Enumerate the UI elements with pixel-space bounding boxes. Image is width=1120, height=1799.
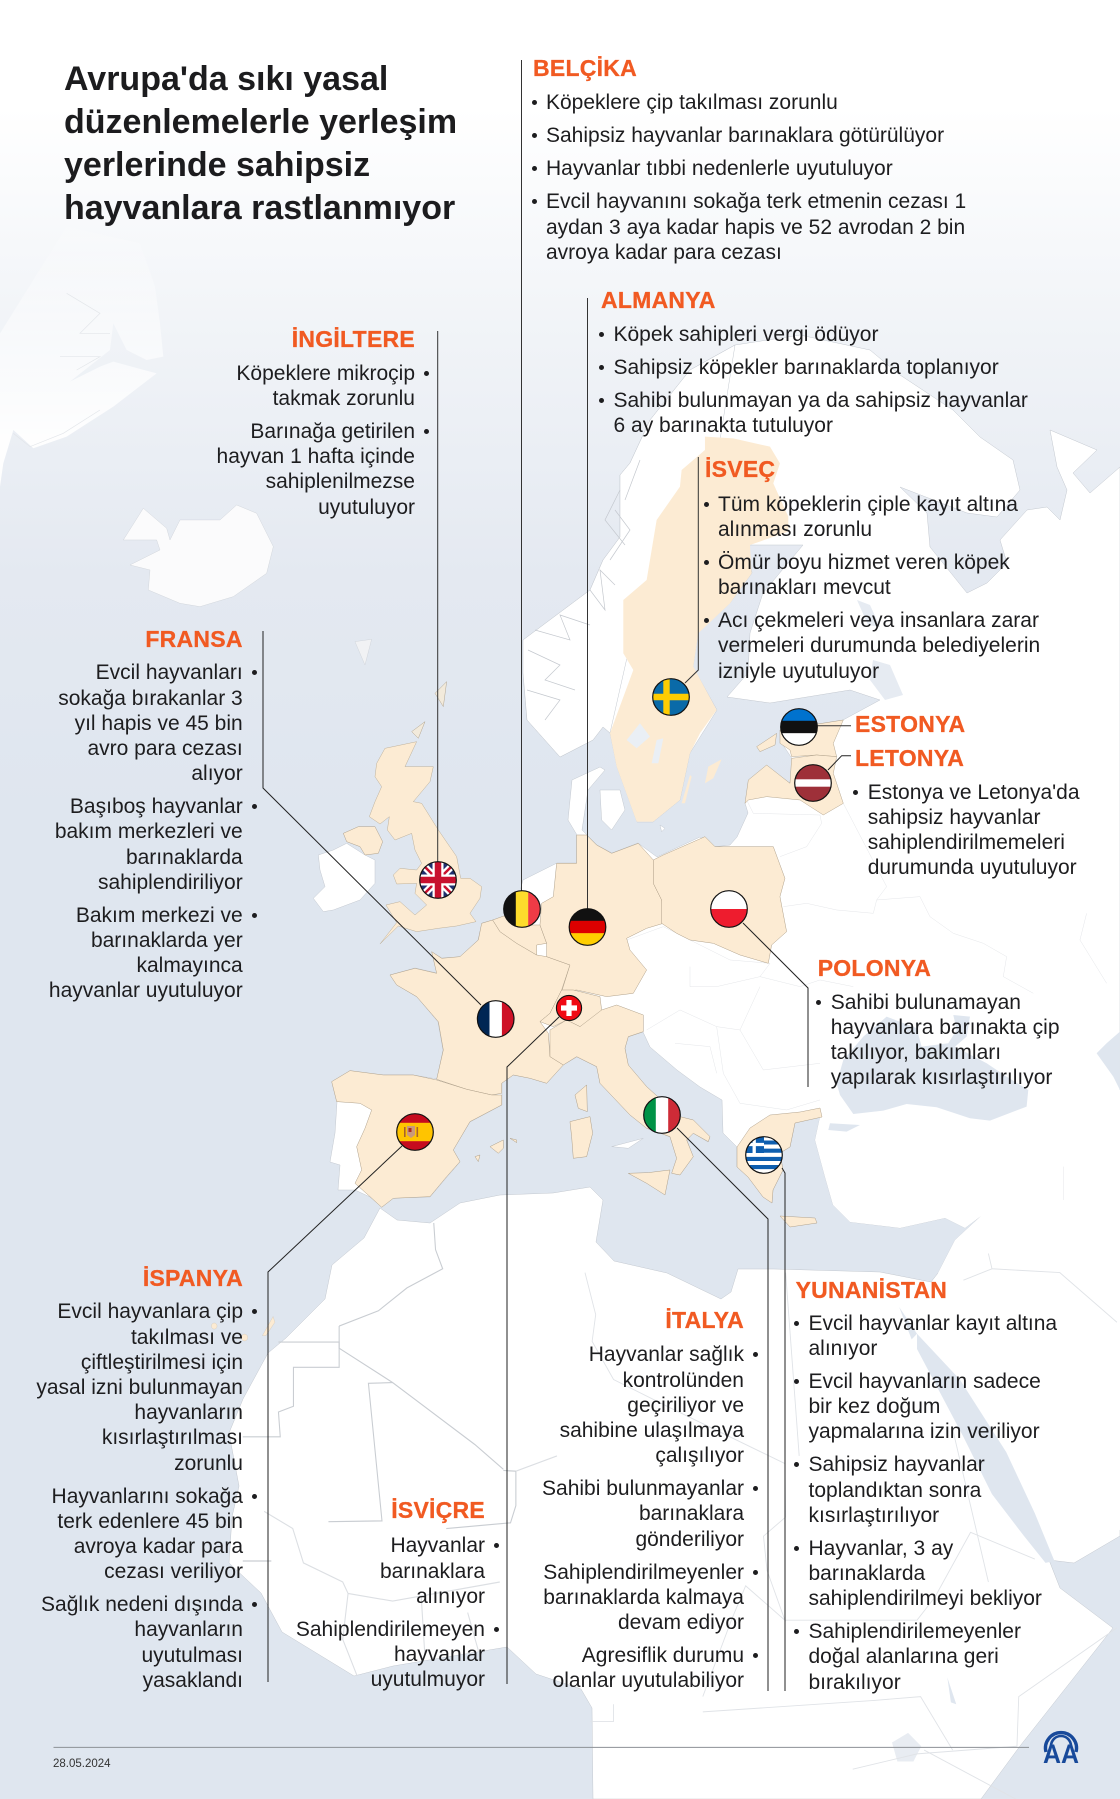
flag: Poland	[710, 890, 748, 928]
text block: İsveç: Tüm köpeklerin çiple kayıt altına	[718, 493, 1018, 516]
text block: İsviçre	[296, 1534, 499, 1691]
leader line: Sweden	[685, 457, 698, 683]
text block: İtalya: gönderiliyor	[635, 1528, 744, 1551]
text block: İsveç: izniyle uyutuluyor	[718, 660, 879, 683]
countries: Britain, France, Spain, Belgium, Germany, Switzerland, Italy, Poland	[332, 742, 787, 1207]
text block: İspanya: Sağlık nedeni dışında	[41, 1593, 243, 1616]
text block: Fransa: hayvanlar uyutuluyor	[49, 979, 243, 1002]
text block: Fransa: barınaklarda yer	[91, 929, 243, 952]
text block: Almanya: 6 ay barınakta tutuluyor	[614, 414, 833, 437]
flag: Italy	[643, 1096, 681, 1134]
text block: Belçika: Sahipsiz hayvanlar barınaklara götürülüyor	[546, 124, 944, 147]
title	[64, 60, 457, 226]
logo: Anadolu Agency: AA	[1043, 1739, 1079, 1769]
text block: Fransa: sahiplendiriliyor	[98, 871, 243, 894]
text block: İngiltere: Köpeklere mikroçip	[236, 362, 415, 385]
text block: İngiltere: hayvan 1 hafta içinde	[217, 445, 415, 468]
leader line: Germany	[586, 298, 588, 910]
text block: İtalya: kontrolünden	[623, 1369, 744, 1392]
text block: İsveç: Acı çekmeleri veya insanlara zarar	[718, 609, 1039, 632]
text block: İngiltere: Barınağa getirilen	[250, 420, 415, 443]
heading: Estonya: ESTONYA	[855, 711, 965, 737]
text block: İspanya: uyutulması	[141, 1644, 243, 1667]
text block: İngiltere	[217, 362, 429, 519]
Canary Islands	[211, 1317, 275, 1341]
text block: İspanya: terk edenlere 45 bin	[57, 1510, 243, 1533]
leader line: Estonia	[817, 725, 851, 727]
terrain shading: Norway	[527, 460, 640, 720]
text block: İngiltere: uyutuluyor	[318, 496, 415, 519]
leader line: Greece	[782, 1168, 785, 1691]
text block: Fransa: barınaklarda	[126, 846, 243, 869]
text block: İtalya: sahibine ulaşılmaya	[560, 1419, 744, 1442]
flag: Belgium	[503, 890, 541, 928]
heading: İtalya: İTALYA	[665, 1307, 744, 1333]
text block: Yunanistan: sahiplendirilmeyi bekliyor	[808, 1587, 1042, 1610]
text block: Yunanistan: barınaklarda	[808, 1562, 925, 1585]
flag: United Kingdom	[419, 861, 457, 899]
flag: Greece	[745, 1136, 783, 1174]
text block: İspanya: avroya kadar para	[74, 1535, 243, 1558]
flag: Sweden	[652, 678, 690, 716]
text block: Fransa: sokağa bırakanlar 3	[58, 687, 243, 710]
text block: Yunanistan: Evcil hayvanların sadece	[808, 1370, 1041, 1393]
land: Greenland	[0, 227, 163, 487]
text block: İtalya: barınaklara	[639, 1502, 744, 1525]
flag: France	[477, 1000, 515, 1038]
text block: Yunanistan	[794, 1312, 1058, 1694]
text block: İtalya: barınaklarda kalmaya	[543, 1586, 744, 1609]
inner seas and lakes	[828, 600, 1120, 1762]
text block: İspanya: hayvanların	[134, 1401, 243, 1424]
text block: Almanya: Sahibi bulunmayan ya da sahipsiz hayvanlar	[614, 389, 1028, 412]
text block: Yunanistan: bir kez doğum	[808, 1395, 940, 1418]
text block: Estonya ve Letonya	[853, 781, 1080, 879]
leader line: France	[263, 631, 481, 1005]
text block: Belçika: Hayvanlar tıbbi nedenlerle uyutuluyor	[546, 157, 893, 180]
text block: Yunanistan: Evcil hayvanlar kayıt altına	[808, 1312, 1057, 1335]
text block: İtalya: çalışılıyor	[655, 1444, 744, 1467]
title: düzenlemelerle yerleşim	[64, 102, 457, 140]
text block: Yunanistan: doğal alanlarına geri	[808, 1645, 999, 1668]
heading: İsveç: İSVEÇ	[705, 456, 775, 482]
text block: İspanya: yasal izni bulunmayan	[36, 1376, 243, 1399]
text block: İtalya	[542, 1343, 758, 1692]
text block: İsveç: barınakları mevcut	[718, 576, 891, 599]
text block: İtalya: olanlar uyutulabiliyor	[553, 1669, 744, 1692]
title: yerlerinde sahipsiz	[64, 146, 370, 184]
leader line: Poland	[743, 923, 808, 1087]
text block: Belçika	[532, 91, 966, 264]
text block: Belçika: Köpeklere çip takılması zorunlu	[546, 91, 838, 114]
text block: İtalya: Hayvanlar sağlık	[589, 1343, 744, 1366]
flag: Germany	[568, 908, 606, 946]
leader line: Latvia	[828, 756, 851, 770]
country: Sweden	[412, 437, 788, 822]
leader line: Belgium	[520, 60, 522, 892]
text block: İspanya: zorunlu	[174, 1452, 243, 1475]
text block: Fransa: yıl hapis ve 45 bin	[75, 712, 243, 735]
text block: Yunanistan: yapmalarına izin veriliyor	[808, 1420, 1040, 1443]
text block: Estonya ve Letonya: sahipsiz hayvanlar	[868, 806, 1040, 829]
text block: İtalya: devam ediyor	[618, 1611, 744, 1634]
text block: Polonya: Sahibi bulunamayan	[831, 991, 1021, 1014]
text block: Yunanistan: toplandıktan sonra	[808, 1479, 981, 1502]
text block: İngiltere: sahiplenilmezse	[266, 470, 415, 493]
leader line: Italy	[677, 1128, 768, 1691]
text block: Belçika: Evcil hayvanını sokağa terk etmenin cezası 1	[546, 190, 966, 213]
text block: Fransa: Bakım merkezi ve	[76, 904, 243, 927]
text block: Yunanistan: bırakılıyor	[808, 1671, 901, 1694]
title: Avrupa'da sıkı yasal	[64, 60, 388, 98]
text block: Almanya: Sahipsiz köpekler barınaklarda toplanıyor	[614, 356, 999, 379]
text block: İsveç: vermeleri durumunda belediyelerin	[718, 634, 1040, 657]
heading: Belçika: BELÇİKA	[533, 55, 637, 81]
land: Eurasia and Africa	[229, 335, 1120, 1799]
text block: Polonya: hayvanlara barınakta çip	[831, 1016, 1060, 1039]
text block: Fransa: Evcil hayvanları	[96, 661, 243, 684]
leader line: Switzerland	[507, 1017, 559, 1684]
land: Anatolia and Middle East	[815, 1090, 1120, 1530]
text block: Fransa: avro para cezası	[87, 737, 243, 760]
title: hayvanlara rastlanmıyor	[64, 188, 455, 226]
text block: Yunanistan: kısırlaştırılıyor	[808, 1504, 939, 1527]
text block: Fransa: alıyor	[191, 762, 243, 785]
flag: Estonia	[780, 708, 818, 746]
text block: İsviçre: alınıyor	[416, 1585, 485, 1608]
text block: İsveç	[704, 493, 1040, 683]
text block: İsveç: alınması zorunlu	[718, 518, 872, 541]
flag: Spain	[396, 1113, 434, 1151]
text block: İtalya: Agresiflik durumu	[582, 1644, 744, 1667]
date: 28.05.2024	[53, 1758, 111, 1770]
highlighted countries	[211, 437, 843, 1341]
heading: Polonya: POLONYA	[818, 955, 931, 981]
text block: İsveç: Ömür boyu hizmet veren köpek	[718, 551, 1010, 574]
text block: Estonya ve Letonya: Estonya ve Letonya'da	[868, 781, 1080, 804]
text block: Fransa: kalmayınca	[136, 954, 243, 977]
text block: İtalya: Sahibi bulunmayanlar	[542, 1477, 744, 1500]
text block: İsviçre: uyutulmuyor	[371, 1668, 485, 1691]
text block: Estonya ve Letonya: durumunda uyutuluyor	[868, 856, 1077, 879]
land: west and south islands and Ireland	[313, 790, 665, 1148]
country: Greece	[737, 1108, 822, 1203]
leader line: Spain	[268, 1146, 402, 1682]
leader line: England	[437, 331, 439, 862]
text block: Fransa: Başıboş hayvanlar	[70, 795, 243, 818]
footer divider	[54, 1746, 1029, 1748]
text block: Almanya: Köpek sahipleri vergi ödüyor	[614, 323, 878, 346]
text block: İsviçre: Hayvanlar	[390, 1534, 485, 1557]
text block: Fransa	[49, 661, 257, 1002]
heading: İngiltere: İNGİLTERE	[292, 326, 415, 352]
heading: İsviçre: İSVİÇRE	[391, 1497, 485, 1523]
text block: Yunanistan: Hayvanlar, 3 ay	[808, 1537, 953, 1560]
text block: İspanya	[36, 1300, 257, 1692]
text block: İspanya: çiftleştirilmesi için	[81, 1351, 243, 1374]
text block: Belçika: avroya kadar para cezası	[546, 241, 782, 264]
text block: İngiltere: takmak zorunlu	[273, 387, 415, 410]
text block: İspanya: hayvanların	[134, 1618, 243, 1641]
heading: Almanya: ALMANYA	[601, 287, 716, 313]
text block: İsviçre: Sahiplendirilemeyen	[296, 1618, 485, 1641]
text block: İtalya: geçiriliyor ve	[627, 1394, 744, 1417]
island: Iceland	[123, 505, 372, 665]
text block: İsviçre: barınaklara	[380, 1560, 485, 1583]
flag: Switzerland	[556, 995, 582, 1021]
countries: Estonia, Latvia	[745, 720, 843, 815]
text block: İspanya: yasaklandı	[143, 1669, 243, 1692]
text block: Polonya: yapılarak kısırlaştırılıyor	[831, 1066, 1052, 1089]
text block: İtalya: Sahiplendirilmeyenler	[543, 1561, 744, 1584]
text block: Belçika: aydan 3 aya kadar hapis ve 52 avrodan 2 bin	[546, 216, 965, 239]
text block: Fransa: bakım merkezleri ve	[55, 820, 243, 843]
text block: Yunanistan: alınıyor	[808, 1337, 877, 1360]
heading: Yunanistan: YUNANİSTAN	[796, 1277, 947, 1303]
heading: İspanya: İSPANYA	[143, 1265, 243, 1291]
text block: İspanya: takılması ve	[131, 1326, 243, 1349]
heading: Fransa: FRANSA	[145, 626, 243, 652]
text block: İspanya: Evcil hayvanlara çip	[57, 1300, 243, 1323]
land: Norway	[523, 345, 735, 757]
text block: İspanya: Hayvanlarını sokağa	[52, 1485, 243, 1508]
text block: Yunanistan: Sahiplendirilemeyenler	[808, 1620, 1021, 1643]
text block: Estonya ve Letonya: sahiplendirilmemeleri	[868, 831, 1065, 854]
text block: İsviçre: hayvanlar	[394, 1643, 485, 1666]
text block: Yunanistan: Sahipsiz hayvanlar	[808, 1453, 985, 1476]
borders on neutral land	[243, 800, 1117, 1799]
heading: Letonya: LETONYA	[855, 745, 964, 771]
text block: Almanya	[599, 323, 1028, 437]
text block: İspanya: cezası veriliyor	[104, 1560, 243, 1583]
text block: Polonya	[816, 991, 1060, 1089]
text block: Polonya: takılıyor, bakımları	[831, 1041, 1001, 1064]
text block: İspanya: kısırlaştırılması	[102, 1426, 243, 1449]
flag: Latvia	[794, 764, 832, 802]
